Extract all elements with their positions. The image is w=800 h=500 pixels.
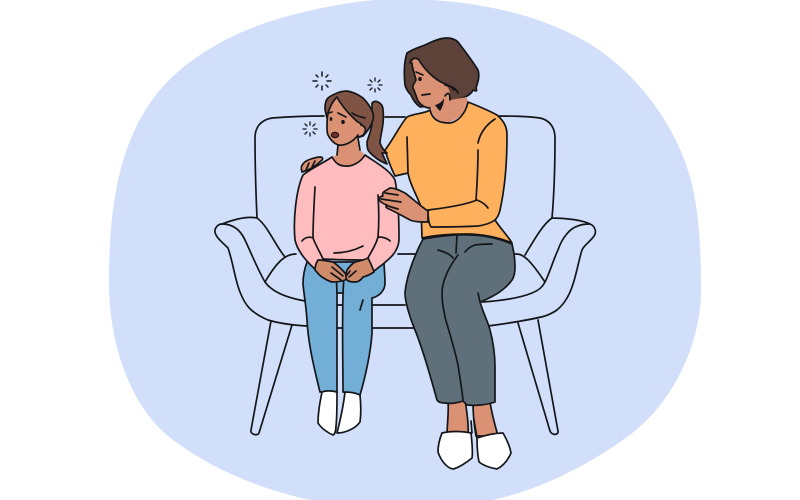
seat lines — [398, 253, 415, 255]
woman mouth — [422, 94, 430, 95]
girl brows — [338, 113, 346, 117]
woman — [385, 38, 515, 469]
woman neck and face — [410, 58, 468, 122]
right legs — [518, 320, 558, 434]
right cushion — [515, 254, 545, 282]
woman hand on shoulder — [301, 157, 323, 172]
girl eyes — [341, 120, 345, 124]
shoulder hand fingers — [306, 161, 315, 170]
girl hair — [325, 91, 373, 140]
girl face and neck — [327, 97, 365, 166]
girl right hand — [346, 258, 374, 282]
woman hair — [404, 38, 479, 107]
armchair — [215, 116, 595, 435]
woman sleeve details — [407, 119, 495, 227]
woman trouser folds — [438, 235, 492, 400]
sparkle left — [303, 122, 317, 136]
chair back — [255, 116, 324, 218]
girl fingers — [331, 267, 356, 280]
left arm — [222, 217, 285, 257]
left legs — [251, 321, 292, 435]
girl — [294, 91, 399, 435]
woman sweater — [385, 102, 512, 243]
woman neck shadow — [435, 98, 444, 111]
girl jeans seam — [336, 270, 337, 293]
girl ponytail — [367, 101, 387, 164]
girl left hand — [315, 260, 346, 282]
girl socks — [318, 391, 337, 435]
right arm — [488, 218, 595, 326]
background blob — [109, 0, 701, 500]
left cushion — [265, 254, 296, 282]
girl sweater — [294, 155, 399, 272]
woman calves — [447, 400, 468, 436]
sparkle right — [368, 78, 382, 92]
woman eye — [418, 77, 422, 81]
girl mouth — [331, 132, 339, 138]
woman hand on back — [379, 188, 428, 222]
sparkle top — [313, 72, 331, 90]
back hand fingers — [381, 193, 401, 209]
woman trousers — [405, 235, 515, 405]
girl jeans — [303, 262, 385, 395]
woman brow — [416, 72, 423, 75]
woman shoes — [438, 432, 472, 469]
girl sweater details — [302, 187, 390, 259]
